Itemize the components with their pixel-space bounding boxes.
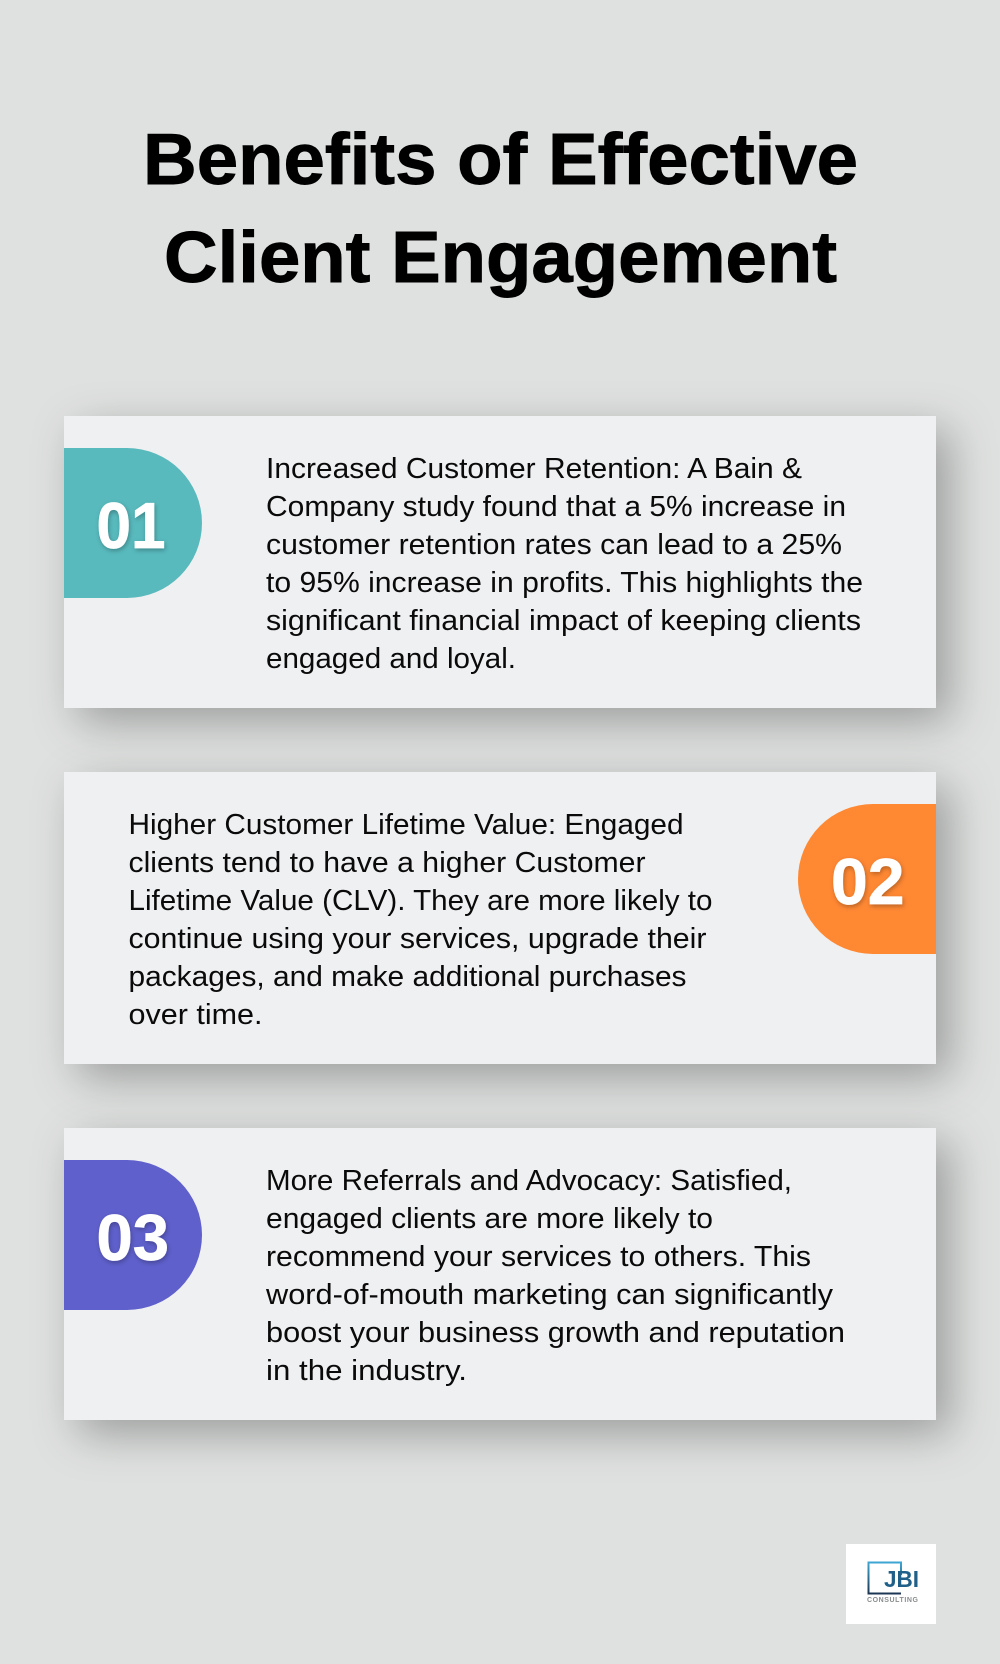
panel: card 01 [64,416,936,708]
title: Client Engagement [164,218,837,298]
title [143,120,858,298]
panel: card 03 [64,1128,936,1420]
card 03 text: in the industry. [266,1355,467,1387]
logo wordmark JBI: JBI [884,1566,919,1592]
badge 03 [64,1160,202,1310]
card 03 text: More Referrals and Advocacy: Satisfied, [266,1165,792,1197]
badge 02 [798,804,936,954]
logo background [846,1544,936,1624]
icon: logo square [868,1562,901,1594]
card 02 text [128,809,712,1031]
card 02 text: continue using your services, upgrade their [128,923,707,955]
panel: card 02 [64,772,936,1064]
card 02 background [64,772,936,1064]
card 02 text: packages, and make additional purchases [128,961,686,993]
card 01 text: engaged and loyal. [266,643,516,675]
badge 01: 01 [96,489,166,562]
card 02 text: clients tend to have a higher Customer [128,847,646,879]
card 02 text: Lifetime Value (CLV). They are more likely to [128,885,712,917]
logo: JBI Consulting [846,1544,936,1624]
card 03 text: recommend your services to others. This [266,1241,811,1273]
card 01 text: to 95% increase in profits. This highlights the [266,567,863,599]
title: Benefits of Effective [143,120,858,200]
card 03 text: boost your business growth and reputation [266,1317,845,1349]
card 03 text: engaged clients are more likely to [266,1203,713,1235]
logo wordmark CONSULTING: CONSULTING [867,1597,919,1604]
badge 01 [64,448,202,598]
card 02 text: over time. [128,999,262,1031]
card 01 text: customer retention rates can lead to a 25% [266,529,842,561]
card 02 text: Higher Customer Lifetime Value: Engaged [128,809,684,841]
card 03 text [265,1165,845,1387]
card 01 background [64,416,936,708]
card 03 text: word-of-mouth marketing can significantly [265,1279,834,1311]
card 01 text: Company study found that a 5% increase in [266,491,846,523]
badge 03: 03 [96,1201,169,1274]
card 03 background [64,1128,936,1420]
card 01 text: Increased Customer Retention: A Bain & [266,453,802,485]
badge 02: 02 [831,845,904,918]
card 01 text [266,453,863,675]
card 01 text: significant financial impact of keeping clients [266,605,861,637]
